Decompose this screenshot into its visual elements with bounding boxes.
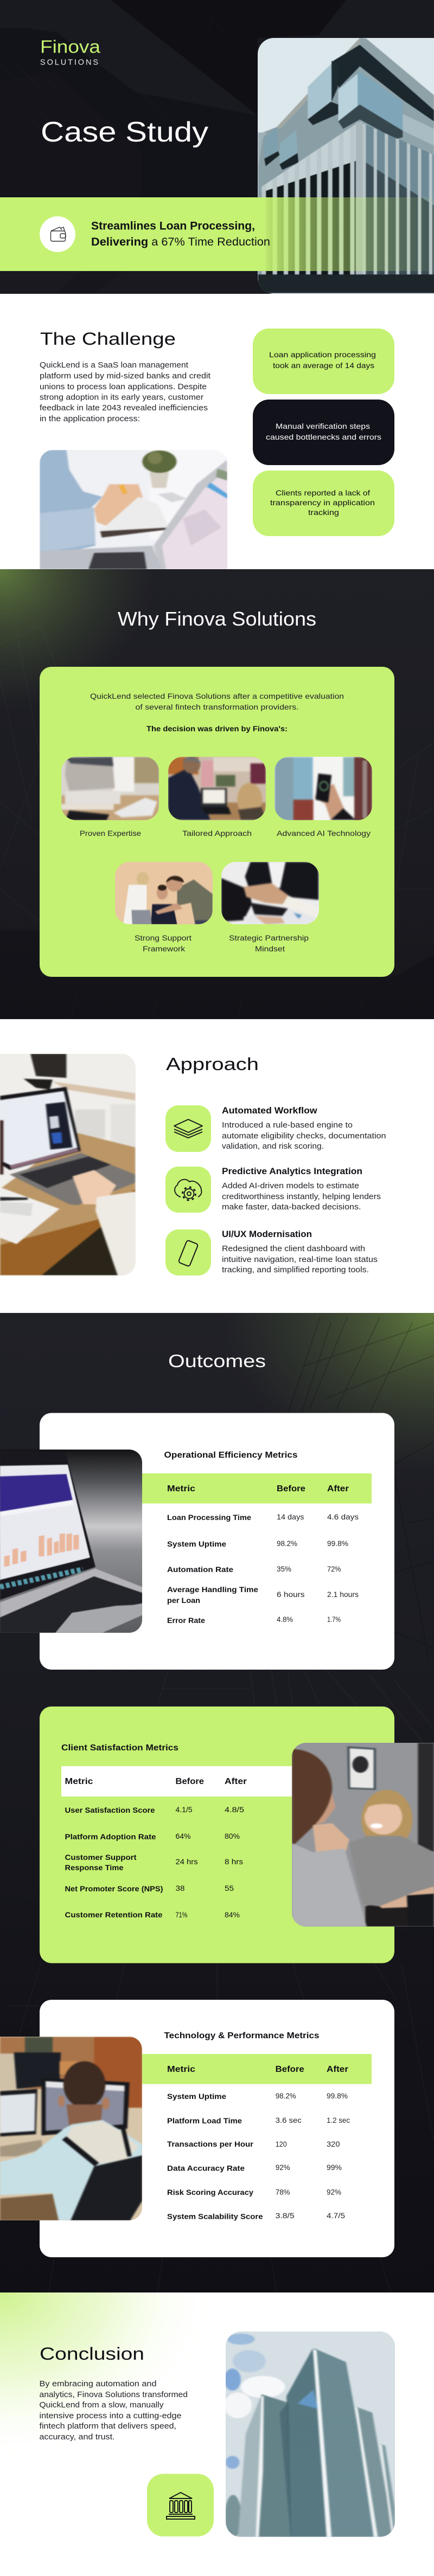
panel: outcomes	[0, 1313, 434, 2292]
headline text	[91, 220, 270, 248]
table: client satisfaction: Response Time	[65, 1863, 124, 1872]
table: technology and performance: 92%	[327, 2188, 341, 2197]
table: technology and performance: Risk Scoring Accuracy	[167, 2188, 253, 2197]
section background	[0, 1313, 434, 2292]
intro text: The decision was driven by Finova's:	[146, 724, 288, 733]
heading: outcomes: Outcomes	[168, 1351, 266, 1371]
icon: smartphone	[165, 1229, 211, 1276]
label: strong support framework: Strong Support	[135, 933, 192, 942]
challenge description: platform used by mid-sized banks and credit	[40, 372, 210, 381]
text: automated workflow: Introduced a rule-based engine to	[222, 1121, 353, 1130]
conclusion text: By embracing automation and	[39, 2380, 156, 2388]
photo: tailored approach	[168, 756, 266, 820]
card: technology and performance metrics	[0, 2000, 394, 2257]
card: lack of transparency: Clients reported a lack of	[276, 488, 370, 497]
label: strategic partnership mindset: Strategic Partnership	[229, 933, 309, 942]
title: Case Study	[41, 117, 208, 148]
icon: cloud gear	[165, 1167, 211, 1213]
table: client satisfaction: 64%	[176, 1832, 191, 1840]
text: ui/ux modernisation: tracking, and simplified reporting tools.	[222, 1266, 369, 1274]
challenge description: strong adoption in its early years, customer	[40, 394, 203, 402]
table: client satisfaction: 80%	[225, 1832, 240, 1840]
table: client satisfaction: 4.8/5	[225, 1805, 244, 1814]
text: automated workflow: automate eligibility checks, documentation	[222, 1132, 386, 1141]
text: automated workflow: Automated Workflow	[222, 1105, 317, 1116]
card: processing time	[253, 329, 394, 394]
icon: layers	[165, 1105, 211, 1152]
card: processing time: took an average of 14 days	[273, 361, 374, 370]
photo: laptop on wooden desk	[0, 1054, 136, 1276]
card: lack of transparency: transparency in application	[270, 498, 375, 507]
logo	[40, 37, 101, 67]
table: client satisfaction: Before	[176, 1777, 204, 1786]
card: lack of transparency	[253, 471, 394, 536]
table: technology and performance: Transactions per Hour	[167, 2140, 254, 2148]
text: predictive analytics	[222, 1166, 381, 1212]
text: ui/ux modernisation	[222, 1229, 378, 1274]
label: tailored approach: Tailored Approach	[182, 829, 252, 838]
table: technology and performance: 98.2%	[276, 2091, 296, 2100]
label: advanced ai technology: Advanced AI Technology	[277, 829, 371, 838]
card: manual verification: Manual verification steps	[276, 422, 370, 430]
table: client satisfaction: 71%	[176, 1910, 188, 1919]
chart title: technology and performance: Technology & Performance Metrics	[164, 2031, 319, 2040]
conclusion text: QuickLend from a slow, manually	[39, 2401, 164, 2410]
item: predictive analytics	[165, 1166, 381, 1213]
table: operational efficiency: System Uptime	[167, 1540, 226, 1548]
panel: hero	[0, 0, 434, 294]
panel: decision drivers	[40, 667, 394, 977]
panel: why finova solutions	[0, 569, 434, 1019]
table: operational efficiency: 35%	[277, 1564, 291, 1573]
table: operational efficiency: Before	[277, 1484, 305, 1493]
table: technology and performance: Before	[276, 2065, 304, 2074]
photo: proven expertise	[61, 757, 159, 821]
challenge description: feedback in late 2043 revealed inefficiencies	[40, 404, 208, 413]
card: manual verification	[253, 400, 394, 465]
table: technology and performance: 320	[327, 2140, 340, 2148]
text: predictive analytics: Predictive Analytics Integration	[222, 1166, 362, 1176]
conclusion text: fintech platform that delivers speed,	[39, 2422, 176, 2431]
table: technology and performance: 3.8/5	[276, 2211, 295, 2220]
label: strong support framework: Framework	[143, 944, 186, 953]
table: operational efficiency: per Loan	[167, 1596, 200, 1605]
table: operational efficiency: Average Handling Time	[167, 1585, 258, 1594]
card: operational efficiency metrics	[0, 1413, 394, 1670]
table: operational efficiency: 99.8%	[327, 1539, 348, 1548]
table: client satisfaction: 38	[176, 1884, 185, 1892]
table: client satisfaction	[61, 1766, 295, 1919]
label: strategic partnership mindset: Mindset	[255, 944, 285, 953]
photo: glass skyscrapers	[224, 2332, 395, 2538]
table: client satisfaction: Net Promoter Score (NPS)	[65, 1884, 163, 1893]
photo: laptop with dashboard	[0, 1450, 142, 1633]
lime headline band	[0, 197, 434, 271]
card: client satisfaction metrics	[40, 1706, 434, 1963]
table: client satisfaction: 24 hrs	[176, 1857, 197, 1866]
icon: bank	[147, 2474, 214, 2536]
logo: SOLUTIONS	[40, 59, 98, 67]
table: client satisfaction: After	[225, 1777, 247, 1786]
table: operational efficiency: Loan Processing Time	[167, 1513, 251, 1522]
table: technology and performance: 99%	[327, 2163, 342, 2172]
challenge description	[40, 361, 210, 423]
headline text: Streamlines Loan Processing,	[91, 220, 255, 232]
table: technology and performance: 3.6 sec	[276, 2116, 302, 2124]
table: client satisfaction: 55	[225, 1884, 234, 1892]
panel: approach	[0, 1054, 385, 1276]
photo: strong support	[115, 862, 213, 925]
table: technology and performance: After	[327, 2065, 348, 2074]
text: ui/ux modernisation: UI/UX Modernisation	[222, 1229, 312, 1239]
table: technology and performance	[142, 2054, 372, 2220]
section background	[0, 569, 434, 1019]
table: client satisfaction: Customer Retention Rate	[65, 1910, 163, 1919]
panel: the challenge	[40, 329, 394, 569]
heading: the challenge: The Challenge	[40, 329, 176, 349]
table: operational efficiency: 72%	[327, 1564, 341, 1573]
table: client satisfaction: Customer Support	[65, 1853, 137, 1862]
table: technology and performance: Metric	[167, 2065, 195, 2074]
text: predictive analytics: Added AI-driven models to estimate	[222, 1182, 359, 1190]
table: technology and performance: 4.7/5	[327, 2211, 345, 2220]
table: operational efficiency: 4.8%	[277, 1615, 293, 1624]
table: operational efficiency: 1.7%	[327, 1615, 341, 1624]
item: automated workflow	[165, 1105, 386, 1152]
table: client satisfaction: Metric	[65, 1777, 93, 1786]
table: technology and performance: 1.2 sec	[327, 2116, 350, 2124]
label: proven expertise: Proven Expertise	[80, 829, 141, 838]
text: ui/ux modernisation: intuitive navigation, real-time loan status	[222, 1255, 378, 1264]
photo: advanced ai technology	[275, 757, 372, 821]
conclusion text: analytics, Finova Solutions transformed	[39, 2391, 188, 2399]
table: technology and performance: Platform Load Time	[167, 2116, 242, 2125]
challenge description: QuickLend is a SaaS loan management	[40, 361, 188, 370]
item: ui/ux modernisation	[165, 1229, 378, 1276]
table: technology and performance: System Uptime	[167, 2092, 226, 2101]
intro text: of several fintech transformation providers.	[136, 703, 298, 711]
intro text: QuickLend selected Finova Solutions after a competitive evaluation	[90, 692, 344, 700]
icon: wallet	[40, 216, 75, 252]
table: operational efficiency: 98.2%	[277, 1539, 297, 1548]
table: operational efficiency: After	[327, 1484, 349, 1493]
table: operational efficiency: 14 days	[277, 1512, 304, 1521]
heading: why finova solutions: Why Finova Solutions	[118, 608, 316, 630]
card: lack of transparency: tracking	[308, 508, 339, 517]
text: predictive analytics: make faster, data-backed decisions.	[222, 1203, 361, 1212]
table: client satisfaction: 8 hrs	[225, 1857, 243, 1866]
challenge description: unions to process loan applications. Despite	[40, 383, 207, 391]
chart title: client satisfaction: Client Satisfaction Metrics	[61, 1743, 178, 1753]
photo: hands at a desk with laptop	[40, 450, 229, 569]
text: automated workflow	[222, 1105, 386, 1151]
table: technology and performance: 120	[276, 2140, 287, 2148]
photo: man working at monitors	[0, 2037, 142, 2220]
table: technology and performance: 99.8%	[327, 2091, 348, 2100]
photo: glass office building	[258, 38, 434, 294]
challenge description: in the application process:	[40, 415, 140, 423]
text: automated workflow: validation, and risk scoring.	[222, 1142, 324, 1151]
table: operational efficiency: 4.6 days	[327, 1512, 359, 1521]
table: technology and performance: 92%	[276, 2163, 290, 2172]
table: client satisfaction: Platform Adoption Rate	[65, 1832, 156, 1841]
photo: strategic partnership	[221, 862, 319, 925]
table: client satisfaction: User Satisfaction Score	[65, 1806, 155, 1814]
text: predictive analytics: creditworthiness instantly, helping lenders	[222, 1193, 381, 1201]
table: technology and performance: Data Accuracy Rate	[167, 2164, 245, 2173]
text: ui/ux modernisation: Redesigned the client dashboard with	[222, 1245, 365, 1253]
logo: Finova	[40, 37, 101, 56]
label: strategic partnership mindset	[229, 933, 309, 953]
chart title: operational efficiency: Operational Efficiency Metrics	[164, 1451, 297, 1460]
heading: approach: Approach	[166, 1054, 259, 1074]
table: client satisfaction: 4.1/5	[176, 1805, 193, 1814]
label: strong support framework	[135, 933, 192, 953]
table: technology and performance: 78%	[276, 2188, 290, 2197]
table: operational efficiency: 6 hours	[277, 1590, 305, 1599]
table: operational efficiency: Automation Rate	[167, 1565, 233, 1574]
photo: two women in conversation	[292, 1743, 434, 1927]
table: operational efficiency: Error Rate	[167, 1616, 205, 1625]
table: operational efficiency	[142, 1473, 372, 1625]
heading: conclusion: Conclusion	[40, 2344, 144, 2364]
card: processing time: Loan application processing	[269, 350, 376, 359]
conclusion text: intensive process into a cutting-edge	[39, 2412, 181, 2420]
headline text: Delivering a 67% Time Reduction	[91, 236, 270, 248]
table: client satisfaction: 84%	[225, 1910, 240, 1919]
intro text	[90, 692, 344, 733]
hero background	[0, 0, 434, 294]
table: operational efficiency: 2.1 hours	[327, 1590, 359, 1599]
panel: conclusion	[0, 2292, 395, 2537]
card: manual verification: caused bottlenecks and errors	[266, 433, 381, 441]
conclusion text: accuracy, and trust.	[39, 2433, 115, 2442]
table: operational efficiency: Metric	[167, 1484, 195, 1493]
conclusion text	[39, 2380, 188, 2442]
table: technology and performance: System Scalability Score	[167, 2212, 263, 2220]
